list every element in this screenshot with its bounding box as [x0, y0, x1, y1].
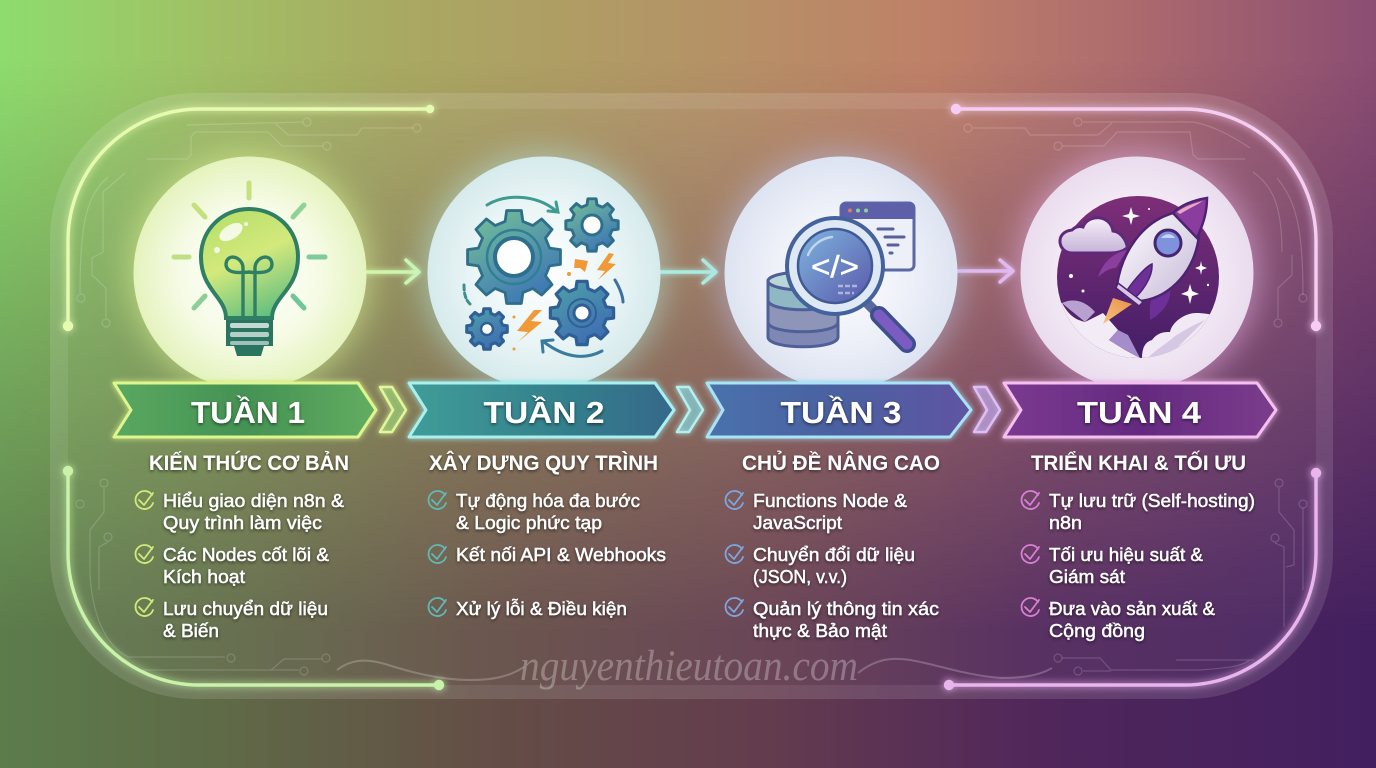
icon: database — [768, 272, 838, 347]
icon: bottom clouds — [1062, 300, 1210, 358]
bullet list: Hiểu giao diện n8n & — [163, 490, 345, 511]
bullet list: Xử lý lỗi & Điều kiện — [456, 598, 627, 619]
column: week 4 — [1022, 451, 1255, 641]
icon circle: lightbulb — [134, 156, 366, 390]
circuit traces decoration — [76, 118, 1307, 675]
icon: stars — [1069, 207, 1209, 304]
neon line: bottom right — [946, 470, 1320, 688]
banner: week 3 — [707, 383, 971, 437]
check icons — [136, 491, 153, 616]
column: week 3 — [726, 451, 940, 641]
bullet list: JavaScript — [753, 512, 842, 533]
icon: rocket body — [1116, 198, 1207, 306]
icon: top right gear — [566, 199, 618, 251]
chevron: 3 to 4 — [974, 387, 1000, 432]
icon: cycle arrows — [464, 197, 623, 356]
bullet list: thực & Bảo mật — [753, 620, 887, 641]
icon: bulb — [201, 209, 298, 356]
bullet list: Kích hoạt — [163, 566, 245, 587]
bullet list: n8n — [1049, 512, 1082, 533]
column: week 1 — [136, 451, 349, 641]
chevron: 2 to 3 — [677, 387, 703, 432]
icon circle: rocket — [1020, 156, 1254, 390]
bullet list: Chuyển đổi dữ liệu — [753, 544, 915, 565]
icon: large gear — [468, 211, 560, 303]
check icons — [429, 491, 446, 616]
banner label: TUẦN 1 — [191, 395, 305, 430]
arrow: week 2 to 3 — [660, 260, 716, 283]
check icons — [1022, 491, 1039, 616]
icon: flame — [1103, 298, 1132, 324]
bullet list — [1049, 490, 1255, 641]
bullet list — [163, 490, 345, 641]
watermark — [337, 643, 1052, 690]
icon: magnifier lens — [787, 218, 883, 314]
bullet list: (JSON, v.v.) — [753, 566, 847, 587]
bullet list: Kết nối API & Webhooks — [456, 544, 666, 565]
icon: cloud — [1060, 218, 1127, 253]
neon line: top left — [64, 106, 432, 330]
banner: week 2 — [409, 383, 674, 437]
bullet list — [753, 490, 939, 641]
neon line: top right — [952, 106, 1320, 330]
heading: CHỦ ĐỀ NÂNG CAO — [742, 451, 940, 475]
chevron: 1 to 2 — [380, 387, 406, 432]
bullet list: Quản lý thông tin xác — [753, 598, 939, 619]
bullet list: Cộng đồng — [1049, 620, 1145, 641]
icon circle: gears — [428, 156, 660, 390]
icon: magnifier lens: </> — [811, 249, 859, 284]
icon: night sky — [1057, 196, 1219, 358]
heading: TRIỂN KHAI & TỐI ƯU — [1031, 451, 1246, 475]
bullet list: Functions Node & — [753, 490, 908, 511]
bullet list: Các Nodes cốt lõi & — [163, 544, 330, 565]
bullet list: Đưa vào sản xuất & — [1049, 598, 1216, 619]
circle halos — [130, 153, 1257, 393]
column: week 2 — [429, 451, 666, 619]
heading: KIẾN THỨC CƠ BẢN — [149, 451, 349, 475]
bullet list: Giám sát — [1049, 566, 1125, 587]
watermark: nguyenthieutoan.com — [520, 643, 858, 690]
banner: week 4 — [1004, 383, 1276, 437]
bullet list: Tự lưu trữ (Self-hosting) — [1049, 490, 1255, 511]
icon: bottom right gear — [550, 281, 614, 345]
icon: bottom left gear — [467, 309, 507, 349]
bullet list — [456, 490, 666, 619]
banner label: TUẦN 3 — [780, 395, 902, 430]
icon: rocket fins — [1098, 250, 1170, 320]
icon: magnifier handle — [868, 304, 907, 344]
bullet list: & Biến — [163, 620, 219, 641]
icon: browser window — [841, 203, 914, 270]
heading: XÂY DỰNG QUY TRÌNH — [429, 451, 658, 475]
neon line: bottom left — [64, 468, 442, 688]
banner: week 1 — [114, 383, 376, 437]
banner label: TUẦN 4 — [1077, 395, 1202, 430]
icon: light rays — [174, 183, 325, 308]
arrow: week 3 to 4 — [958, 260, 1013, 282]
icon: sparks — [512, 253, 616, 350]
bullet list: Lưu chuyển dữ liệu — [163, 598, 328, 619]
glass panel — [50, 93, 1333, 699]
bullet list: Tự động hóa đa bước — [456, 490, 640, 511]
arrow: week 1 to 2 — [366, 260, 419, 283]
bullet list: & Logic phức tạp — [456, 512, 602, 533]
icon circle: code search — [724, 156, 958, 390]
banner label: TUẦN 2 — [484, 395, 604, 430]
bullet list: Quy trình làm việc — [163, 512, 322, 533]
bullet list: Tối ưu hiệu suất & — [1049, 544, 1204, 565]
check icons — [726, 491, 743, 616]
